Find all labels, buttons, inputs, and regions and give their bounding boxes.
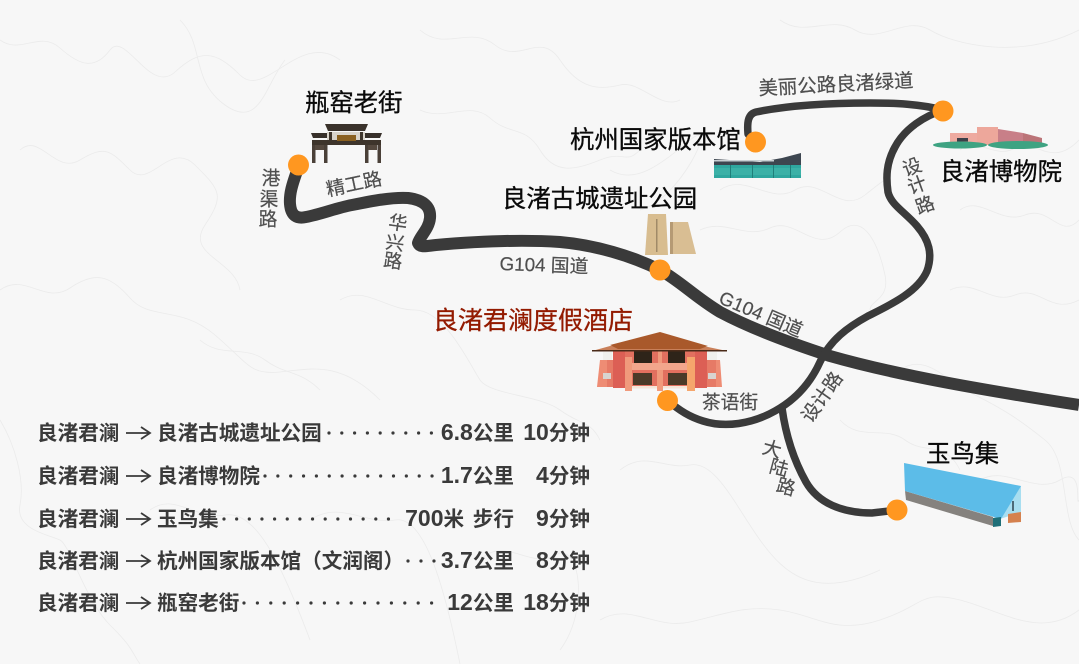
row: 良渚古城遗址公园: 良渚古城遗址公园 [157,421,322,445]
row: 杭州国家版本馆（文润阁）: 良渚君澜 [37,549,119,573]
road label: 精工路: 精工路 [324,168,384,200]
row: 瓶窑老街: 12公里 [447,589,514,615]
road label: 设计路 north: 设 [900,154,925,180]
road label: 港渠路: 路 [259,208,278,230]
row: 良渚古城遗址公园: 6.8公里 [441,419,514,445]
icon: 良渚古城遗址 ruins [645,214,696,255]
marker: 杭州国家版本馆 [745,132,766,152]
road label: 华兴路 [382,211,409,273]
row: 良渚博物院 [37,462,590,488]
road label: 华兴路: 兴 [384,231,406,255]
row: 良渚博物院: 良渚博物院 [157,464,260,488]
label: 良渚博物院: 良渚博物院 [940,159,1062,186]
road label: 设计路 north: 计 [905,172,929,198]
road: 设计路 and 茶语街 [667,110,943,424]
road label: 港渠路: 港 [262,168,281,188]
icon: 杭州国家版本馆 building [714,153,801,178]
icon: 良渚博物院 building [933,127,1048,149]
distance table [37,419,590,615]
row: 玉鸟集 [37,505,590,531]
marker: 玉鸟集 [886,500,908,520]
row: 杭州国家版本馆（文润阁）: 杭州国家版本馆（文润阁） [157,549,404,573]
road: G104 and connecting roads to 瓶窑老街 [290,168,1079,405]
road label: 港渠路 [259,168,281,230]
row: 瓶窑老街 [37,589,590,615]
row: 良渚古城遗址公园: 良渚君澜 [37,421,119,445]
row: 瓶窑老街: 18分钟 [523,589,590,615]
road label: 设计路 north [900,154,938,218]
road label: 茶语街: 茶语街 [702,392,758,412]
row: 杭州国家版本馆（文润阁）: 8分钟 [536,547,590,573]
marker: 良渚君澜度假酒店 [657,390,678,411]
row: 瓶窑老街: 瓶窑老街 [157,592,239,615]
label: 瓶窑老街: 瓶窑老街 [305,90,403,117]
road label: 大陆路: 路 [774,474,798,500]
road: 美丽公路良渚绿道 [748,103,943,142]
row: 玉鸟集: 9分钟 [536,505,590,531]
road label: 大陆路 [760,436,798,500]
row: 良渚博物院: 良渚君澜 [37,464,119,488]
row: 杭州国家版本馆（文润阁） [37,547,590,573]
row: 玉鸟集: 玉鸟集 [157,508,219,531]
marker: 良渚博物院 [932,100,954,122]
road: 大陆路 [782,408,897,513]
road label: 设计路 south: 设计路 [797,368,847,426]
road label: G104 国道 west: G104 国道 [499,253,589,277]
road label: G104 国道 east: G104 国道 [716,287,806,341]
row: 瓶窑老街: 良渚君澜 [37,591,119,615]
label: 良渚君澜度假酒店: 良渚君澜度假酒店 [433,307,633,335]
label: 良渚古城遗址公园: 良渚古城遗址公园 [502,186,697,213]
icon: 良渚君澜度假酒店 hotel [592,332,727,391]
row: 杭州国家版本馆（文润阁）: 3.7公里 [441,547,514,573]
road label: 港渠路: 渠 [260,188,279,210]
road label: 华兴路: 路 [382,249,404,273]
row: 玉鸟集: 良渚君澜 [37,507,119,531]
row: 玉鸟集: 700米 步行 [405,505,514,531]
road label: 美丽公路良渚绿道: 美丽公路良渚绿道 [758,70,914,100]
icon: 瓶窑老街 gate [311,124,382,163]
row: 良渚博物院: 1.7公里 [441,462,514,488]
row: 良渚博物院: 4分钟 [536,462,590,488]
road label: 设计路 north: 路 [913,192,938,218]
label: 玉鸟集: 玉鸟集 [926,441,999,468]
marker: 良渚古城遗址公园 [650,260,670,280]
road label: 大陆路: 大 [760,436,784,462]
road label: 大陆路: 陆 [767,455,791,481]
row: 良渚古城遗址公园 [37,419,590,445]
label: 杭州国家版本馆: 杭州国家版本馆 [570,127,741,154]
road label: 华兴路: 华 [387,211,409,235]
icon: 玉鸟集 building [904,463,1021,527]
marker: 瓶窑老街 [288,154,309,176]
row: 良渚古城遗址公园: 10分钟 [523,419,590,445]
